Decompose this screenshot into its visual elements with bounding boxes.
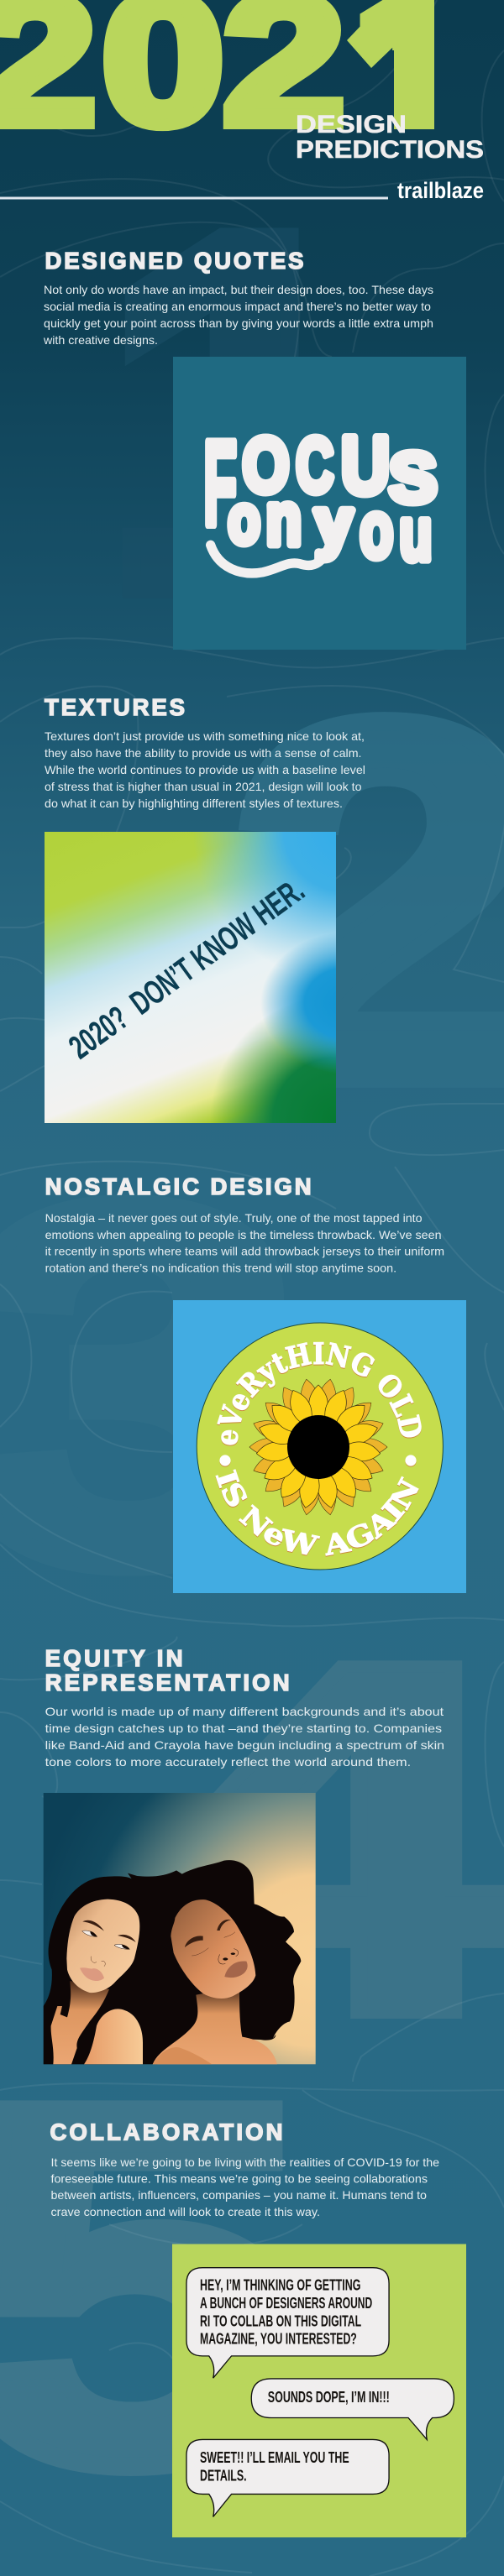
speech bubble 3 xyxy=(186,2439,389,2516)
body text: emotions when appealing to people is the timeless throwback. We’ve seen xyxy=(45,1228,442,1241)
speech bubble 1: A BUNCH OF DESIGNERS AROUND xyxy=(200,2295,372,2312)
speech bubble 1 xyxy=(186,2268,389,2378)
body text: time design catches up to that –and they’re starting to. Companies xyxy=(45,1722,442,1735)
image: focus on you: U xyxy=(341,421,390,511)
body text: do what it can by highlighting different styles of textures. xyxy=(45,797,343,810)
circular lettering: eVeRytHING OLD xyxy=(217,1341,422,1446)
body text: it recently in sports where teams will add throwback jerseys to their uniform xyxy=(45,1244,444,1257)
speech bubble 2: SOUNDS DOPE, I’M IN!!! xyxy=(268,2389,390,2406)
slanted caption: 2020? DON’T KNOW HER. xyxy=(62,871,312,1066)
body text: of stress that is higher than usual in 2021, design will look to xyxy=(45,780,362,793)
section: designed quotes xyxy=(43,248,466,650)
left woman body xyxy=(51,1981,109,2064)
body text: Our world is made up of many different backgrounds and it’s about xyxy=(45,1705,444,1718)
right brows and eye lines xyxy=(185,1920,231,1947)
body text: like Band-Aid and Crayola have begun including a spectrum of skin xyxy=(45,1738,444,1752)
body text: with creative designs. xyxy=(43,333,158,347)
speech bubble 2 xyxy=(251,2379,454,2439)
body text: social media is creating an enormous impact and there’s no better way to xyxy=(44,300,431,313)
section: textures xyxy=(44,698,365,1123)
header xyxy=(0,0,484,203)
right face xyxy=(171,1899,255,1999)
body text xyxy=(45,1211,444,1274)
image: focus on you: n xyxy=(266,477,302,560)
image: focus on you: O xyxy=(243,421,289,509)
right woman neck and shoulder xyxy=(153,1987,277,2064)
body text: It seems like we’re going to be living with the realities of COVID-19 for the xyxy=(50,2155,439,2169)
body text: between artists, influencers, companies – you name it. Humans tend to xyxy=(50,2188,427,2202)
speech bubble 1: RI TO COLLAB ON THIS DIGITAL xyxy=(200,2313,361,2330)
ghost section numerals: 1 xyxy=(99,127,385,698)
trailblaze logo: trailblaze xyxy=(397,178,484,203)
image: focus on you: o xyxy=(228,482,260,558)
image: focus on you: y xyxy=(315,485,353,560)
image: focus on you: u xyxy=(400,493,432,576)
subtitle: DESIGN xyxy=(296,111,407,138)
speech bubble 1: MAGAZINE, YOU INTERESTED? xyxy=(200,2331,357,2349)
heading: TEXTURES xyxy=(45,694,185,720)
body text: foreseeable future. This means we’re going to be seeing collaborations xyxy=(50,2172,428,2186)
section: nostalgic design xyxy=(45,1173,466,1593)
section: equity in representation xyxy=(44,1645,444,2064)
body text: crave connection and will look to create it this way. xyxy=(50,2205,320,2218)
heading: DESIGNED QUOTES xyxy=(45,248,304,274)
big 2021 title xyxy=(0,0,434,131)
subtitle: PREDICTIONS xyxy=(296,136,484,164)
circular lettering xyxy=(215,1341,422,1557)
body text: quickly get your point across than by giving your words a little extra umph xyxy=(44,316,433,330)
badge circle xyxy=(197,1323,443,1570)
body text: they also have the ability to provide us with a sense of calm. xyxy=(45,746,361,760)
image: focus on you xyxy=(173,357,466,650)
heading: NOSTALGIC DESIGN xyxy=(45,1173,312,1199)
image: gradient texture xyxy=(45,832,336,1123)
heading: EQUITY IN xyxy=(45,1645,183,1671)
heading: COLLABORATION xyxy=(50,2119,282,2145)
body text: Textures don’t just provide us with something nice to look at, xyxy=(45,729,365,743)
body text: rotation and there’s no indication this trend will stop anytime soon. xyxy=(45,1261,396,1274)
right nose and lips xyxy=(218,1949,239,1964)
left face xyxy=(66,1899,139,1993)
heading xyxy=(45,1645,290,1696)
left nose and lips xyxy=(91,1957,105,1967)
image: focus on you: C xyxy=(296,421,333,509)
image: sunflower badge xyxy=(173,1300,466,1593)
image: focus on you: F xyxy=(203,416,237,551)
body text: Not only do words have an impact, but their design does, too. These days xyxy=(44,283,433,296)
image: focus on you: S xyxy=(389,439,437,517)
body text xyxy=(50,2155,439,2218)
ghost section numerals: 4 xyxy=(121,1558,504,2120)
circular lettering: IS NeW AGAIN xyxy=(215,1469,419,1557)
section: collaboration xyxy=(50,2119,466,2537)
body text: tone colors to more accurately reflect the world around them. xyxy=(45,1755,411,1769)
body text: While the world continues to provide us with a baseline level xyxy=(45,763,365,776)
hair xyxy=(44,1860,301,2064)
speech bubble 3: DETAILS. xyxy=(200,2467,247,2485)
sunflower xyxy=(249,1377,387,1517)
body text xyxy=(45,1705,444,1769)
ghost section numerals: 2 xyxy=(227,616,504,1188)
image: chat conversation xyxy=(172,2244,466,2537)
left brows and eyes xyxy=(82,1920,136,1942)
body text xyxy=(45,729,365,810)
body text: Nostalgia – it never goes out of style. Truly, one of the most tapped into xyxy=(45,1211,423,1225)
heading: REPRESENTATION xyxy=(45,1669,290,1696)
image: two women illustration xyxy=(44,1793,316,2064)
body text xyxy=(43,283,433,347)
image: focus on you: o xyxy=(360,485,393,573)
speech bubble 3: SWEET!! I’LL EMAIL YOU THE xyxy=(200,2449,349,2467)
header rule xyxy=(0,196,388,200)
speech bubble 1: HEY, I’M THINKING OF GETTING xyxy=(200,2277,360,2295)
subtitle xyxy=(296,111,484,164)
